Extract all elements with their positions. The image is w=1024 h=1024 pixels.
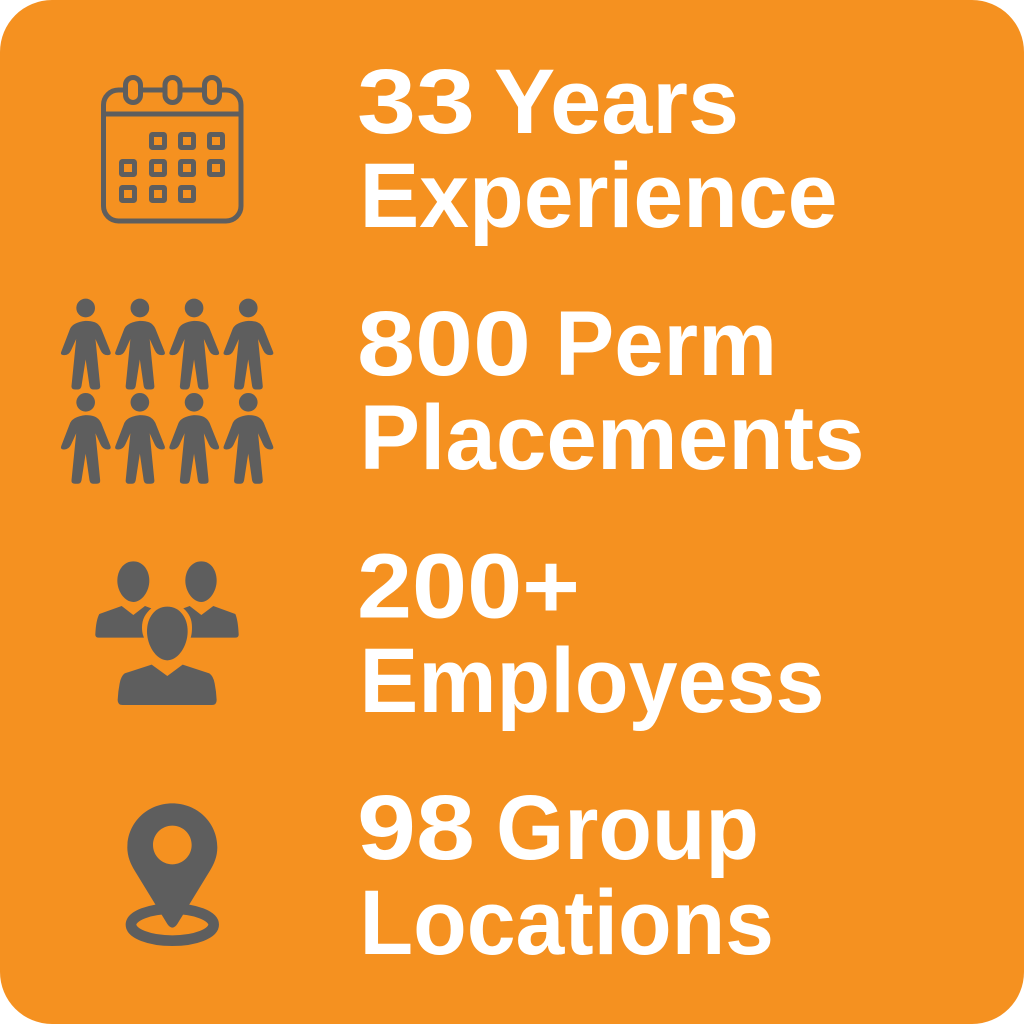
stat: employees [357, 536, 824, 732]
stat: group locations: 98 [357, 777, 475, 879]
stat: years of experience [357, 51, 838, 247]
stat: group locations [357, 777, 774, 974]
stat: years of experience: 33 [357, 51, 475, 153]
icon: eight people [61, 299, 273, 483]
stat: permanent placements: Placements [360, 387, 864, 489]
stat: years of experience: Years [494, 51, 739, 153]
stat: employees: 200+ [357, 536, 580, 638]
stat: years of experience: Experience [360, 145, 838, 247]
stat: permanent placements: 800 [357, 293, 531, 395]
stat: permanent placements [357, 293, 864, 489]
icon: location pin [127, 803, 217, 941]
icon: employee group [95, 561, 239, 705]
icon: calendar [104, 78, 241, 221]
stat: permanent placements: Perm [555, 293, 777, 395]
stat: group locations: Group [496, 777, 759, 879]
stat: employees: Employess [360, 630, 824, 732]
stat: group locations: Locations [360, 872, 774, 974]
